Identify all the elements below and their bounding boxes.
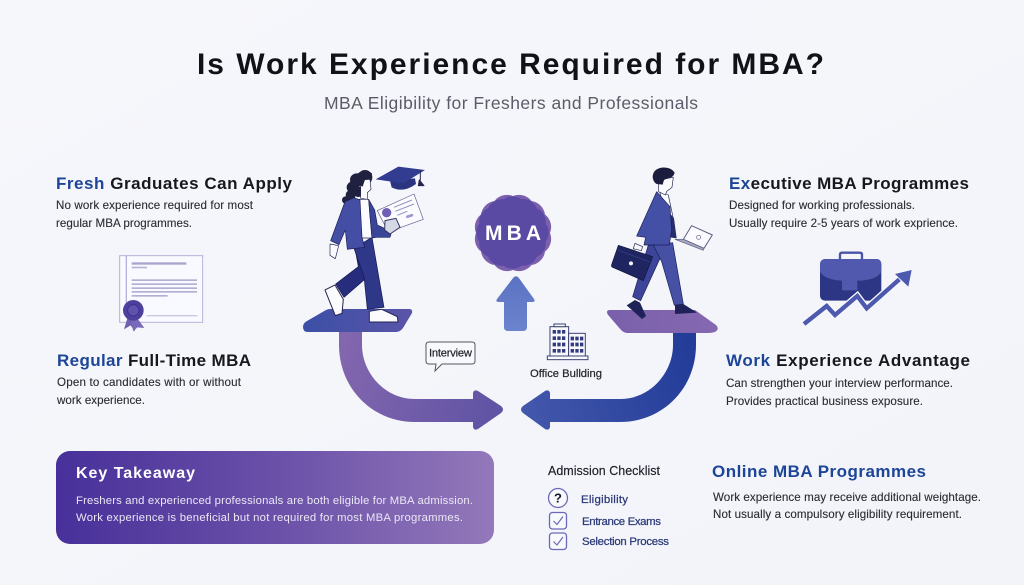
back shoe bbox=[325, 285, 343, 316]
arrow: left curved purple bbox=[339, 330, 503, 430]
icon: certificate with ribbon bbox=[120, 256, 203, 331]
text: executive body: Usually require 2-5 years of work exprience. bbox=[729, 217, 958, 230]
text: key takeaway body: Freshers and experienced professionals are both eligible for MBA admission. bbox=[76, 495, 473, 507]
text: key takeaway body: Work experience is beneficial but not required for most MBA programmes. bbox=[76, 512, 463, 524]
front leg bbox=[653, 243, 683, 305]
badge: MBA: MBA bbox=[485, 222, 541, 245]
item: selection process: Selection Process bbox=[582, 536, 669, 548]
text: regular full-time body: work experience. bbox=[56, 394, 145, 407]
panel: executive MBA bbox=[729, 174, 969, 230]
label: office building: Office Bullding bbox=[530, 368, 602, 380]
heading: work experience advantage: Work Experience Advantage bbox=[726, 351, 970, 370]
arrow: center up bbox=[496, 276, 535, 331]
cap bbox=[390, 178, 416, 190]
illustration: businessman bbox=[611, 168, 712, 319]
text: fresh graduates body: regular MBA programmes. bbox=[56, 217, 192, 230]
text: executive body: Designed for working professionals. bbox=[729, 199, 915, 212]
arrow: right curved blue bbox=[521, 330, 696, 430]
subtitle: MBA Eligibility for Freshers and Professionals bbox=[324, 93, 698, 113]
hand bbox=[330, 244, 339, 259]
title: Is Work Experience Required for MBA? bbox=[197, 48, 824, 81]
laptop bbox=[683, 226, 712, 248]
heading: online MBA: Online MBA Programmes bbox=[712, 462, 926, 481]
face bbox=[361, 179, 371, 199]
item: eligibility bbox=[548, 488, 628, 508]
text: regular full-time body bbox=[56, 376, 242, 407]
jacket with left sleeve bbox=[331, 198, 365, 249]
text: fresh graduates body bbox=[56, 199, 254, 230]
illustration: graduate woman bbox=[325, 167, 425, 322]
right arm bbox=[670, 213, 677, 238]
heading: executive MBA: Executive MBA Programmes bbox=[729, 174, 969, 193]
panel: key takeaway bbox=[56, 451, 494, 544]
icon: office building bbox=[547, 324, 588, 360]
platform: left bbox=[303, 309, 412, 332]
hand on certificate bbox=[385, 218, 400, 234]
back leg bbox=[336, 247, 372, 297]
text: online MBA body bbox=[713, 491, 981, 521]
callout: interview bbox=[426, 342, 475, 371]
item: entrance exams: Entrance Exams bbox=[582, 516, 661, 528]
platform: right bbox=[607, 310, 718, 333]
text: executive body bbox=[729, 199, 958, 230]
shoes bbox=[627, 300, 646, 319]
heading: regular full-time MBA: Regular Full-Time MBA bbox=[57, 351, 251, 370]
panel: admission checklist bbox=[548, 464, 669, 550]
hair bbox=[653, 168, 675, 185]
text: online MBA body: Not usually a compulsory eligibility requirement. bbox=[713, 508, 962, 521]
head bbox=[659, 177, 673, 195]
heading: key takeaway: Key Takeaway bbox=[76, 465, 195, 482]
icon: briefcase with growth arrow bbox=[804, 253, 912, 324]
front leg bbox=[354, 237, 384, 309]
panel: online MBA bbox=[712, 462, 981, 521]
heading: admission checklist: Admission Checklist bbox=[548, 464, 661, 478]
text: advantage body: Can strengthen your interview performance. bbox=[726, 377, 953, 390]
text: online MBA body: Work experience may receive additional weightage. bbox=[713, 491, 981, 504]
shirt bbox=[359, 199, 372, 238]
jacket with sleeve bbox=[637, 192, 672, 245]
heading: fresh graduates: Fresh Graduates Can Apply bbox=[56, 174, 293, 193]
panel: regular full-time bbox=[56, 351, 251, 407]
text: fresh graduates body: No work experience required for most bbox=[56, 199, 254, 212]
callout: interview: Interview bbox=[429, 348, 473, 360]
badge: MBA bbox=[469, 189, 556, 276]
front shoe bbox=[369, 309, 398, 322]
hair back bbox=[342, 170, 372, 204]
briefcase bbox=[634, 246, 641, 250]
back leg bbox=[633, 245, 663, 301]
text: regular full-time body: Open to candidates with or without bbox=[57, 376, 242, 389]
text: advantage body bbox=[726, 377, 953, 408]
certificate bbox=[377, 194, 423, 232]
text: key takeaway body bbox=[76, 495, 473, 524]
shirt bbox=[659, 191, 674, 230]
fringe bbox=[357, 171, 372, 187]
text: advantage body: Provides practical business exposure. bbox=[726, 395, 923, 408]
panel: work experience advantage bbox=[726, 351, 970, 408]
right jacket and arm bbox=[369, 199, 392, 238]
item: eligibility: ? bbox=[554, 490, 562, 506]
panel: fresh graduates bbox=[56, 174, 293, 230]
item: eligibility: Eligibility bbox=[581, 494, 628, 506]
